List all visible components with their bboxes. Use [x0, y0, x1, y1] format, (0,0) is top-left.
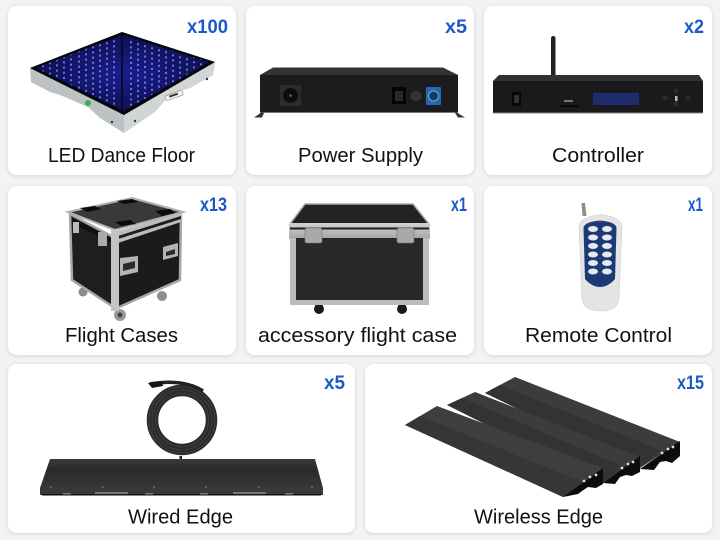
icon: wired edge with coiled cable — [40, 381, 323, 496]
quantity: x2 — [684, 17, 704, 38]
panel: accessory flight case — [246, 186, 474, 355]
panel: Flight Cases — [8, 186, 236, 355]
quantity: x5 — [445, 17, 467, 38]
label: Controller — [552, 145, 644, 167]
label: Flight Cases — [65, 325, 178, 347]
label: Remote Control — [525, 325, 672, 347]
icon: flight case with wheels — [68, 198, 183, 321]
label: accessory flight case — [258, 325, 457, 347]
ramp 2 — [447, 392, 640, 484]
icon: power supply box — [254, 68, 465, 118]
panel: LED Dance Floor — [8, 6, 236, 175]
label: LED Dance Floor — [48, 145, 195, 167]
panel: Remote Control — [484, 186, 712, 355]
label: Wireless Edge — [474, 506, 603, 528]
quantity: x1 — [451, 195, 467, 216]
quantity: x13 — [200, 195, 227, 216]
panel: Wireless Edge — [365, 364, 712, 533]
panel: Controller — [484, 6, 712, 175]
panel: Wired Edge — [8, 364, 355, 533]
label: Wired Edge — [128, 506, 233, 528]
icon: three wireless edge ramps — [405, 377, 680, 497]
icon: LED dance floor tile — [30, 32, 215, 133]
quantity: x5 — [324, 373, 345, 394]
quantity: x1 — [688, 195, 703, 216]
label: Power Supply — [298, 145, 423, 167]
icon: controller unit — [493, 36, 703, 114]
icon: remote control — [579, 203, 622, 311]
panel: Power Supply — [246, 6, 474, 175]
ramp 1 — [405, 406, 603, 497]
quantity: x15 — [677, 373, 704, 394]
ramp 3 — [485, 377, 680, 470]
quantity: x100 — [187, 17, 228, 38]
icon: accessory flight case — [289, 204, 430, 314]
